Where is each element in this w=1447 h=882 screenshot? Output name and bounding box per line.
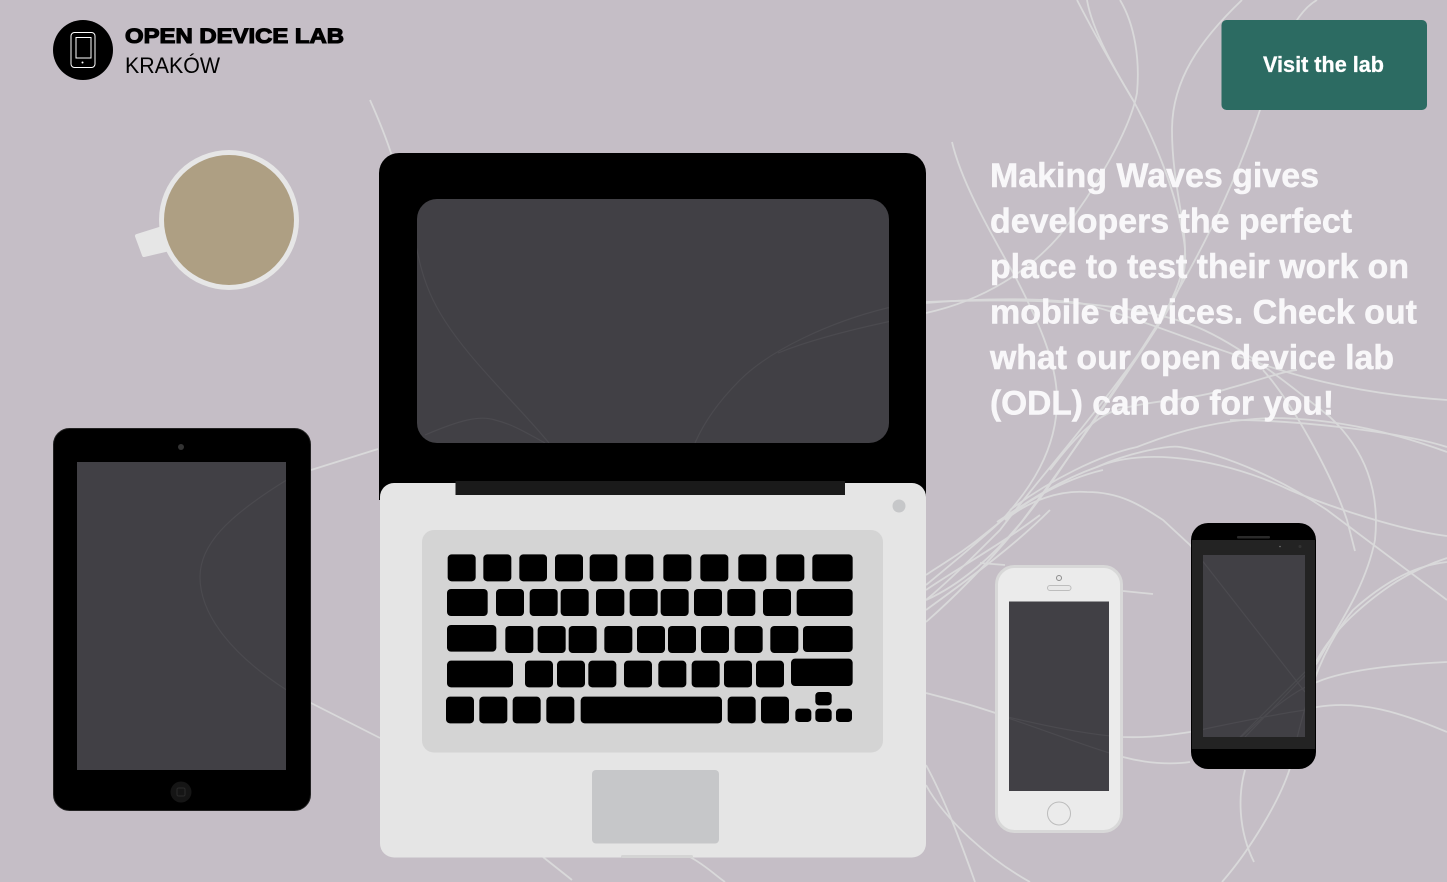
intro paragraph: what our open device lab [989,339,1394,377]
intro paragraph: mobile devices. Check out [990,294,1417,332]
icon: coffee cup [137,150,299,290]
intro paragraph: Making Waves gives [990,157,1319,195]
white smartphone [996,566,1122,832]
laptop hinge [456,481,845,495]
laptop trackpad [592,770,719,844]
laptop base [380,483,926,858]
logo badge [53,20,113,80]
button: visit the lab: Visit the lab [1263,52,1384,77]
laptop keyboard [422,530,883,752]
intro paragraph: (ODL) can do for you! [990,384,1334,422]
logo [53,20,344,80]
laptop front notch [621,855,693,858]
faint wave lines on screens [200,250,1305,753]
laptop screen [417,199,889,443]
laptop [379,153,926,858]
logo subtitle: KRAKÓW [125,53,221,78]
intro paragraph: place to test their work on [990,248,1409,286]
black smartphone [1191,523,1316,769]
logo title: OPEN DEVICE LAB [125,25,344,48]
laptop power button [892,500,906,512]
button: visit the lab [1222,20,1427,110]
tablet [54,428,310,810]
intro paragraph: developers the perfect [990,202,1352,240]
intro paragraph [989,157,1417,422]
laptop lid [379,153,926,500]
